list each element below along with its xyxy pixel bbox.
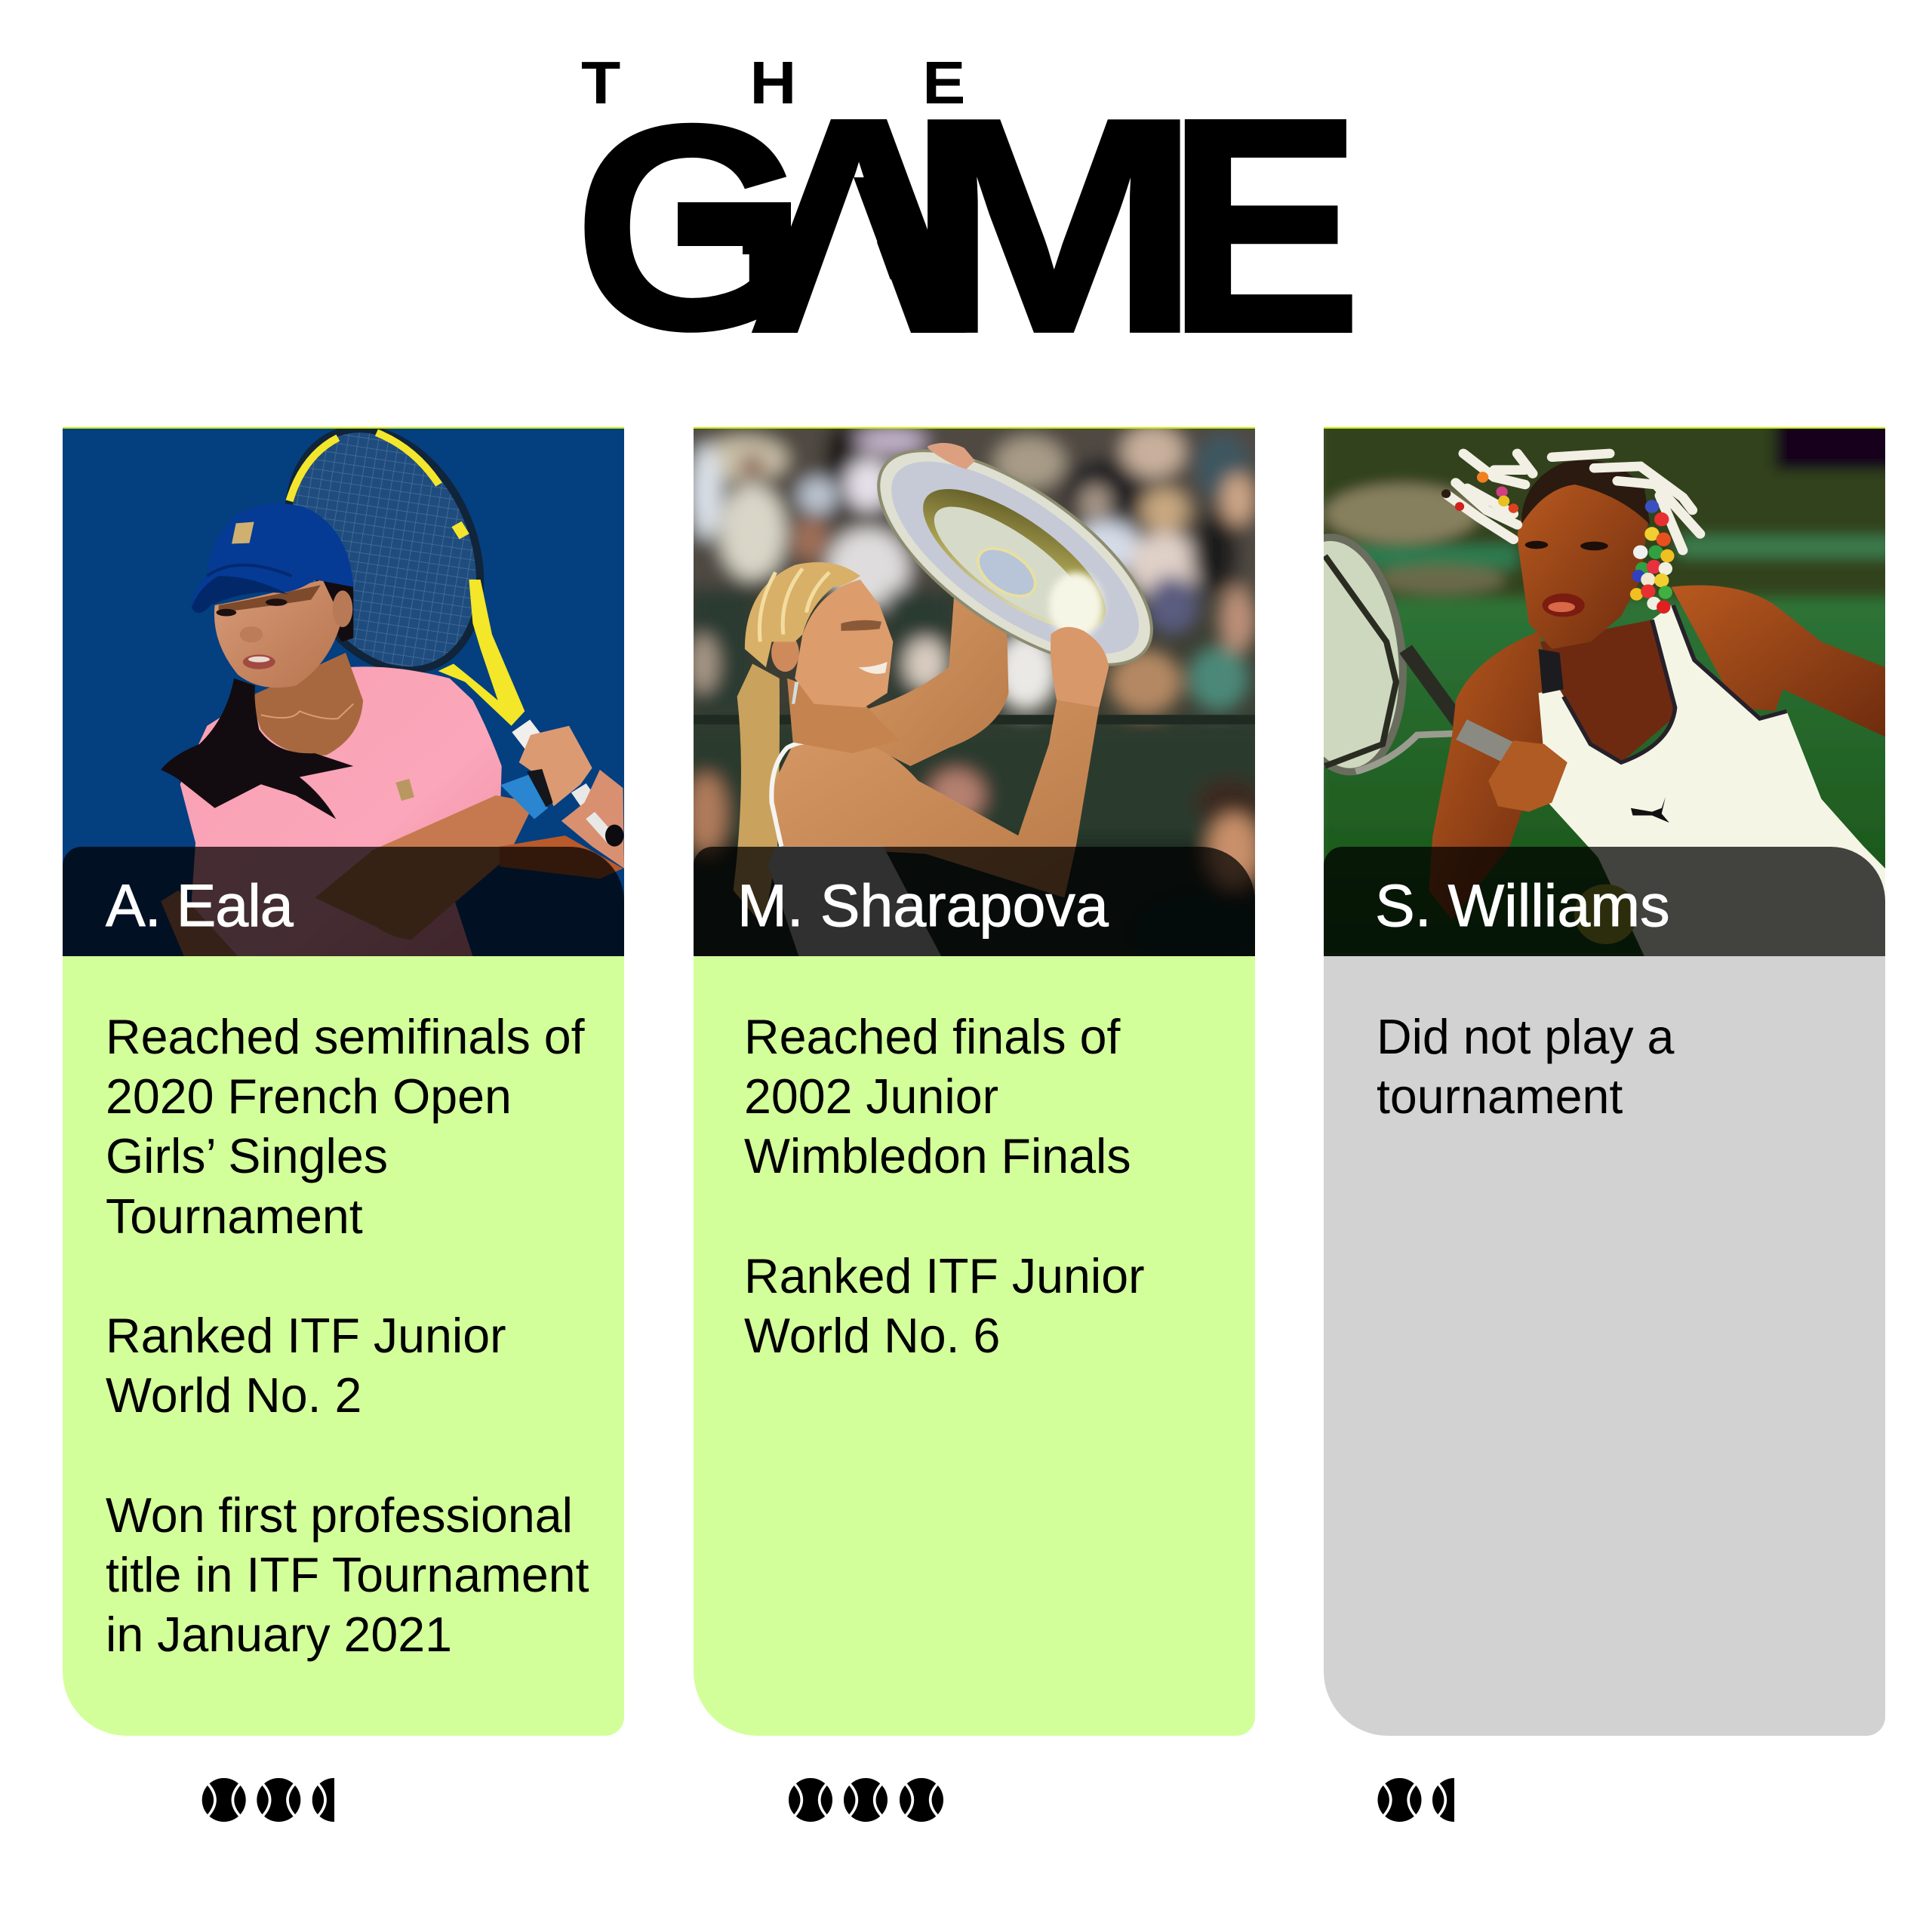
face [795,580,893,708]
icons: tennis balls rating M. Sharapova [789,1778,943,1822]
text: achievements of A. Eala: Tournament [106,1189,363,1244]
photo: A. Eala with racket [63,429,624,956]
text: achievements of A. Eala: Ranked ITF Junior [106,1309,506,1363]
text: S. Williams note: tournament [1377,1069,1623,1124]
panel: M. Sharapova [694,427,1255,1736]
blue cap [191,503,353,613]
ponytail [734,663,780,927]
racket [1266,531,1463,778]
arm [315,795,534,940]
text: achievements of M. Sharapova: 2002 Junior [744,1069,998,1124]
racket [254,402,558,774]
text: achievements of M. Sharapova: Reached finals of [744,1010,1120,1064]
blonde hair [745,562,860,667]
pink shirt [180,666,502,956]
text: S. Williams note [1377,1010,1674,1124]
face [1517,485,1648,649]
icon: tennis ball [789,1778,832,1822]
hand [1488,740,1567,812]
text: achievements of A. Eala: Reached semifinals of [106,1010,585,1064]
title word: GAME [573,55,1361,395]
icons: tennis balls rating A. Eala [202,1778,334,1822]
face [214,580,342,688]
title: THE GAME [574,49,1358,340]
white tank [1539,605,1885,956]
name bar: M. Sharapova [694,847,1255,956]
green edge line [694,427,1255,429]
text: achievements of M. Sharapova: Ranked ITF Junior [744,1249,1145,1303]
blurred court [1313,415,1914,964]
text: S. Williams note: Did not play a [1377,1010,1674,1064]
chest and neck [249,653,363,755]
neck [787,678,899,753]
icon: tennis ball [844,1778,888,1822]
panel: S. Williams [1324,427,1885,1736]
icon: tennis ball [202,1778,246,1822]
name bar: A. Eala [63,847,624,956]
grip between hands [579,788,611,835]
photo: M. Sharapova raising plate [694,429,1255,956]
panel: A. Eala [63,427,624,1736]
text: achievements of A. Eala: Won first professional [106,1488,573,1543]
hair [1521,460,1650,525]
tank top [768,847,941,956]
hands on plate [928,443,975,469]
text: achievements of A. Eala [106,1010,589,1662]
name bar: M. Sharapova: M. Sharapova [737,872,1109,939]
hair [161,678,353,819]
text: achievements of A. Eala: 2020 French Open [106,1069,512,1124]
text: achievements of A. Eala: title in ITF Tournament [106,1548,589,1602]
text: achievements of M. Sharapova: Wimbledon Finals [744,1129,1131,1183]
name bar: S. Williams [1324,847,1885,956]
blurred crowd [679,415,1280,978]
photo: S. Williams forehand [1324,429,1885,956]
silver plate [843,411,1187,703]
white beads [1448,454,1700,550]
tennis ball [1574,884,1638,944]
name bar: A. Eala: A. Eala [106,872,293,939]
icon: partial tennis ball [1432,1778,1476,1822]
green edge line [1324,427,1885,429]
logo: collar label [1539,649,1564,694]
name bar: S. Williams: S. Williams [1375,872,1670,939]
shoulders and arms [772,587,1099,897]
wristband [500,773,548,819]
icon: tennis ball [1378,1778,1422,1822]
hands [519,726,592,806]
racket handle [1462,730,1529,762]
text: achievements of A. Eala: in January 2021 [106,1607,452,1662]
icon: tennis ball [257,1778,300,1822]
coloured beads [1441,472,1675,614]
logo: puma [1631,797,1669,823]
icon: partial tennis ball [312,1778,356,1822]
text: achievements of M. Sharapova [744,1010,1145,1363]
text: achievements of M. Sharapova: World No. 6 [744,1309,1000,1363]
icon: tennis ball [900,1778,943,1822]
title word: THE: THE [581,49,1095,116]
green edge line [63,427,624,429]
skin: arms and chest [1429,586,1885,920]
icons: tennis balls rating S. Williams [1378,1778,1454,1822]
text: achievements of A. Eala: World No. 2 [106,1368,361,1423]
text: achievements of A. Eala: Girls’ Singles [106,1129,388,1183]
